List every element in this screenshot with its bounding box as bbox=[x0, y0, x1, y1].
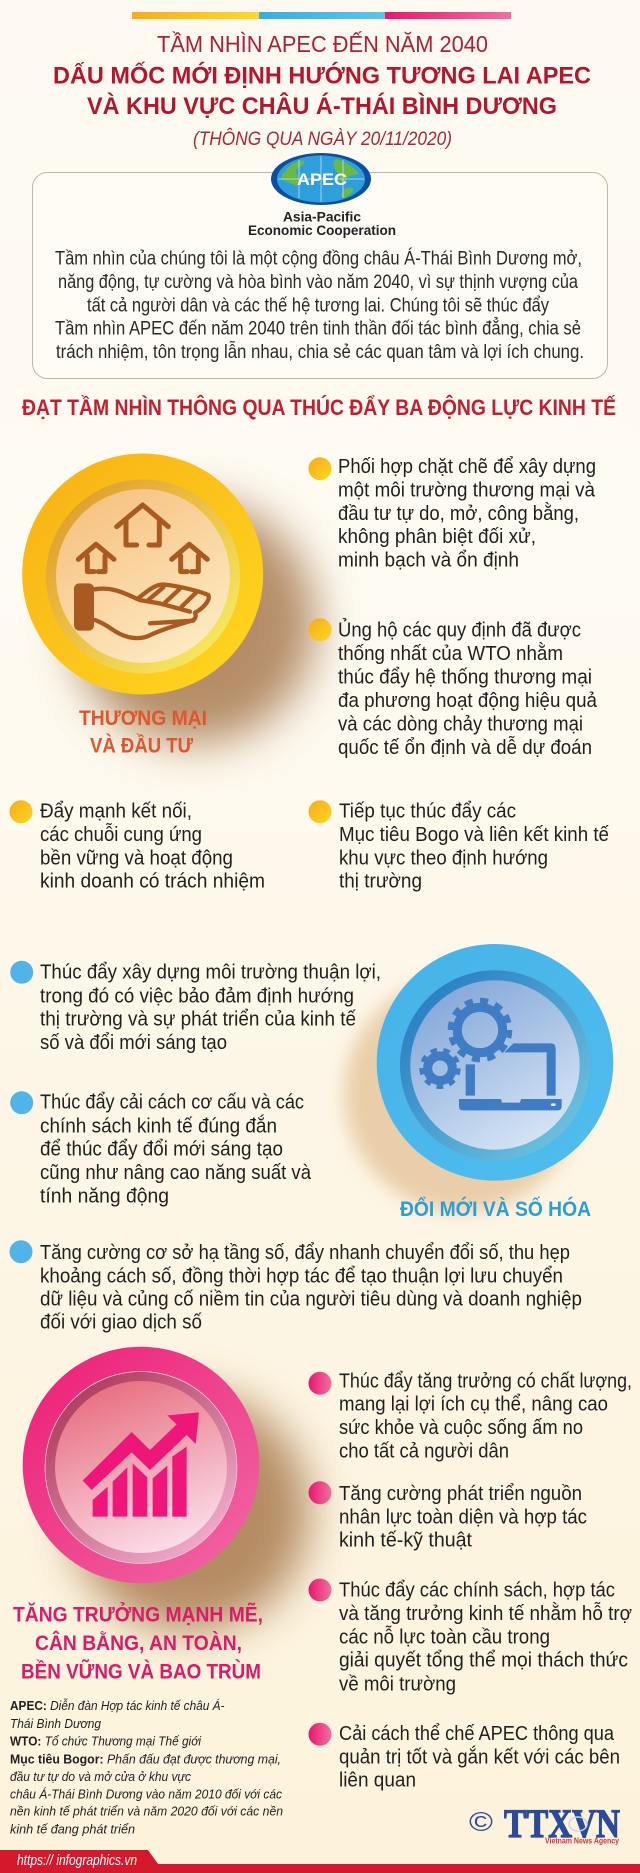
top tricolour bar bbox=[132, 12, 511, 19]
icon: rising bar chart with arrow bbox=[83, 1412, 199, 1517]
panel: innovation and digitalisation bbox=[10, 944, 613, 1334]
bullet item: quality growth: sức khỏe và cuộc sống ấm no bbox=[339, 1417, 583, 1439]
bullet item: enabling environment: trong đó có việc bảo đảm định hướng bbox=[40, 985, 354, 1007]
shadow: trade circle bbox=[72, 500, 316, 744]
bullet item: trade environment: một môi trường thương mại và bbox=[338, 480, 596, 502]
bullet item: WTO rules: và các dòng chảy thương mại bbox=[338, 714, 583, 736]
bullet item: quality growth: cho tất cả người dân bbox=[339, 1440, 509, 1462]
title block: VÀ KHU VỰC CHÂU Á-THÁI BÌNH DƯƠNG bbox=[87, 92, 557, 120]
glossary notes: nền kinh tế phát triển và năm 2020 đối với các nền bbox=[10, 1804, 283, 1819]
bullet item: digital infrastructure: khoảng cách số, đồng thời hợp tác để tạo thuận lợi lưu chuyển bbox=[40, 1265, 563, 1287]
bullet item: trade environment: minh bạch và ổn định bbox=[338, 550, 519, 572]
label: trade and investment: VÀ ĐẦU TƯ bbox=[90, 734, 194, 758]
bullet item: quality growth: mang lại lợi ích cụ thể, nâng cao bbox=[339, 1394, 608, 1416]
bullet item: institutional reform: Cải cách thể chế APEC thông qua bbox=[339, 1723, 615, 1745]
bullet item: quality growth bbox=[308, 1370, 632, 1462]
glossary notes: Mục tiêu Bogor: Phấn đấu đạt được thương mại, bbox=[10, 1751, 281, 1766]
panel: APEC vision bbox=[32, 153, 608, 378]
vision paragraph: Tầm nhìn APEC đến năm 2040 trên tinh thần đối tác bình đẳng, chia sẻ bbox=[55, 318, 581, 340]
bullet item: supply chains bbox=[10, 800, 265, 893]
bullet item: institutional reform bbox=[308, 1723, 620, 1792]
bullet item: environment policy: về môi trường bbox=[339, 1674, 456, 1696]
footer bar bbox=[0, 1850, 640, 1873]
glossary notes: đầu tư tự do và mở cửa ở khu vực bbox=[10, 1769, 191, 1784]
bullet item: supply chains: kinh doanh có trách nhiệm bbox=[40, 871, 265, 893]
bullet item: Bogor goals: thị trường bbox=[339, 871, 422, 893]
bullet item: trade environment bbox=[308, 456, 596, 572]
panel frame bbox=[32, 172, 608, 378]
bullet item: enabling environment bbox=[10, 961, 381, 1054]
bullet item: digital infrastructure: dữ liệu và củng cố niềm tin của người tiêu dùng và doanh nghiệp bbox=[40, 1289, 582, 1311]
logo caption bbox=[248, 210, 396, 238]
bullet item: Bogor goals: Mục tiêu Bogo và liên kết kinh tế bbox=[339, 824, 609, 846]
bullet item: structural reform: để thúc đẩy đổi mới sáng tạo bbox=[40, 1139, 283, 1161]
bullet item: structural reform: tính năng động bbox=[40, 1186, 169, 1208]
bullet item: WTO rules: đa phương hoạt động hiệu quả bbox=[338, 690, 598, 712]
bullet item: environment policy bbox=[308, 1578, 632, 1696]
bullet item: supply chains: các chuỗi cung ứng bbox=[40, 823, 202, 846]
glossary notes: APEC: Diễn đàn Hợp tác kinh tế châu Á- bbox=[10, 1698, 225, 1713]
TTXVN logo bbox=[469, 1801, 620, 1846]
bullet item: trade environment: Phối hợp chặt chẽ để xây dựng bbox=[338, 456, 596, 478]
bullet item: digital infrastructure bbox=[10, 1240, 582, 1334]
vision paragraph: tất cả người dân và các thế hệ tương lai. Chúng tôi sẽ thúc đẩy bbox=[87, 296, 549, 316]
shadow: growth circle bbox=[70, 1392, 310, 1632]
label: growth bbox=[13, 1603, 263, 1683]
TTXVN logo: © bbox=[469, 1807, 493, 1837]
title block: (THÔNG QUA NGÀY 20/11/2020) bbox=[193, 127, 452, 150]
label: innovation and digitalisation: ĐỔI MỚI VÀ SỐ HÓA bbox=[400, 1197, 591, 1221]
glossary notes: Thái Bình Dương bbox=[10, 1716, 102, 1731]
icon: hand holding houses bbox=[74, 505, 209, 638]
TTXVN logo: Vietnam News Agency bbox=[545, 1836, 619, 1846]
bullet item: digital infrastructure: đối với giao dịch số bbox=[40, 1312, 202, 1334]
bullet item: supply chains: bền vững và hoạt động bbox=[40, 847, 233, 869]
panel: trade and investment bbox=[10, 454, 609, 893]
glossary notes: kinh tế đang phát triển bbox=[10, 1821, 135, 1836]
glossary notes: WTO: Tổ chức Thương mại Thế giới bbox=[10, 1734, 202, 1749]
bullet item: Bogor goals: khu vực theo định hướng bbox=[339, 847, 548, 869]
bullet item: enabling environment: Thúc đẩy xây dựng môi trường thuận lợi, bbox=[40, 961, 381, 983]
bullet item: enabling environment: số và đổi mới sáng tạo bbox=[40, 1032, 227, 1054]
footer bar: https:// infographics.vn bbox=[17, 1852, 137, 1869]
glossary notes bbox=[10, 1698, 283, 1836]
label: growth: BỀN VỮNG VÀ BAO TRÙM bbox=[21, 1659, 261, 1683]
vision paragraph bbox=[55, 248, 584, 363]
panel: strong balanced growth bbox=[13, 1347, 632, 1792]
bullet item: environment policy: giải quyết tổng thể mọi thách thức bbox=[339, 1650, 628, 1672]
circle badge: digital bbox=[377, 944, 613, 1181]
label: growth: CÂN BẰNG, AN TOÀN, bbox=[35, 1631, 242, 1655]
circle badge: trade bbox=[22, 454, 263, 694]
bullet item: human resources: Tăng cường phát triển nguồn bbox=[339, 1483, 582, 1505]
bullet item: WTO rules: Ủng hộ các quy định đã được bbox=[338, 618, 581, 642]
bullet item: environment policy: Thúc đẩy các chính sách, hợp tác bbox=[339, 1580, 615, 1602]
bullet item: WTO rules: quốc tế ổn định và dễ dự đoán bbox=[338, 736, 592, 759]
bullet item: trade environment: không phân biệt đối xử, bbox=[338, 526, 536, 548]
TTXVN logo: TTXVN bbox=[504, 1801, 620, 1846]
icon: gears and laptop bbox=[421, 1001, 562, 1110]
bullet item: structural reform: Thúc đẩy cải cách cơ cấu và các bbox=[40, 1091, 304, 1113]
label: growth: TĂNG TRƯỞNG MẠNH MẼ, bbox=[13, 1603, 263, 1627]
bullet item: trade environment: đầu tư tự do, mở, công bằng, bbox=[338, 502, 579, 525]
title block: TẦM NHÌN APEC ĐẾN NĂM 2040 bbox=[157, 30, 488, 57]
bullet item: WTO rules: thúc đẩy hệ thống thương mại bbox=[338, 666, 592, 688]
bullet item: structural reform: chính sách kinh tế đúng đắn bbox=[40, 1114, 277, 1137]
title block bbox=[53, 30, 591, 150]
bullet item: institutional reform: quản trị tốt và gắn kết với các bên bbox=[339, 1745, 620, 1768]
bullet item: Bogor goals: Tiếp tục thúc đẩy các bbox=[339, 801, 516, 823]
label: trade and investment bbox=[79, 707, 207, 758]
bullet item: WTO rules bbox=[308, 618, 598, 759]
label: trade and investment: THƯƠNG MẠI bbox=[79, 707, 207, 730]
bullet item: digital infrastructure: Tăng cường cơ sở hạ tầng số, đẩy nhanh chuyển đổi số, thu hẹp bbox=[40, 1242, 570, 1264]
bullet item: human resources: nhân lực toàn diện và hợp tác bbox=[339, 1506, 587, 1528]
shadow: digital circle bbox=[344, 976, 580, 1212]
logo caption: Asia-Pacific bbox=[283, 210, 361, 224]
bullet item: institutional reform: liên quan bbox=[339, 1770, 416, 1792]
logo caption: Economic Cooperation bbox=[248, 223, 396, 238]
bullet item: human resources bbox=[308, 1481, 587, 1552]
icon: APEC logo: APEC bbox=[297, 170, 347, 189]
bullet item: human resources: kinh tế-kỹ thuật bbox=[339, 1530, 472, 1552]
bullet item: enabling environment: thị trường và sự phát triển của kinh tế bbox=[40, 1009, 356, 1031]
vision paragraph: trách nhiệm, tôn trọng lẫn nhau, chia sẻ các quan tâm và lợi ích chung. bbox=[56, 341, 584, 363]
title block: DẤU MỐC MỚI ĐỊNH HƯỚNG TƯƠNG LAI APEC bbox=[53, 62, 591, 90]
bullet item: WTO rules: thống nhất của WTO nhằm bbox=[338, 642, 563, 665]
bullet item: structural reform: cũng như nâng cao năng suất và bbox=[40, 1162, 312, 1184]
bullet item: supply chains: Đẩy mạnh kết nối, bbox=[40, 801, 192, 823]
bullet item: environment policy: các nỗ lực toàn cầu trong bbox=[339, 1625, 550, 1648]
bullet item: structural reform bbox=[10, 1091, 312, 1208]
icon: APEC logo bbox=[271, 153, 371, 205]
circle badge: growth bbox=[23, 1347, 259, 1583]
bullet item: Bogor goals bbox=[308, 800, 609, 893]
glossary notes: châu Á-Thái Bình Dương vào năm 2010 đối với các bbox=[10, 1786, 282, 1801]
